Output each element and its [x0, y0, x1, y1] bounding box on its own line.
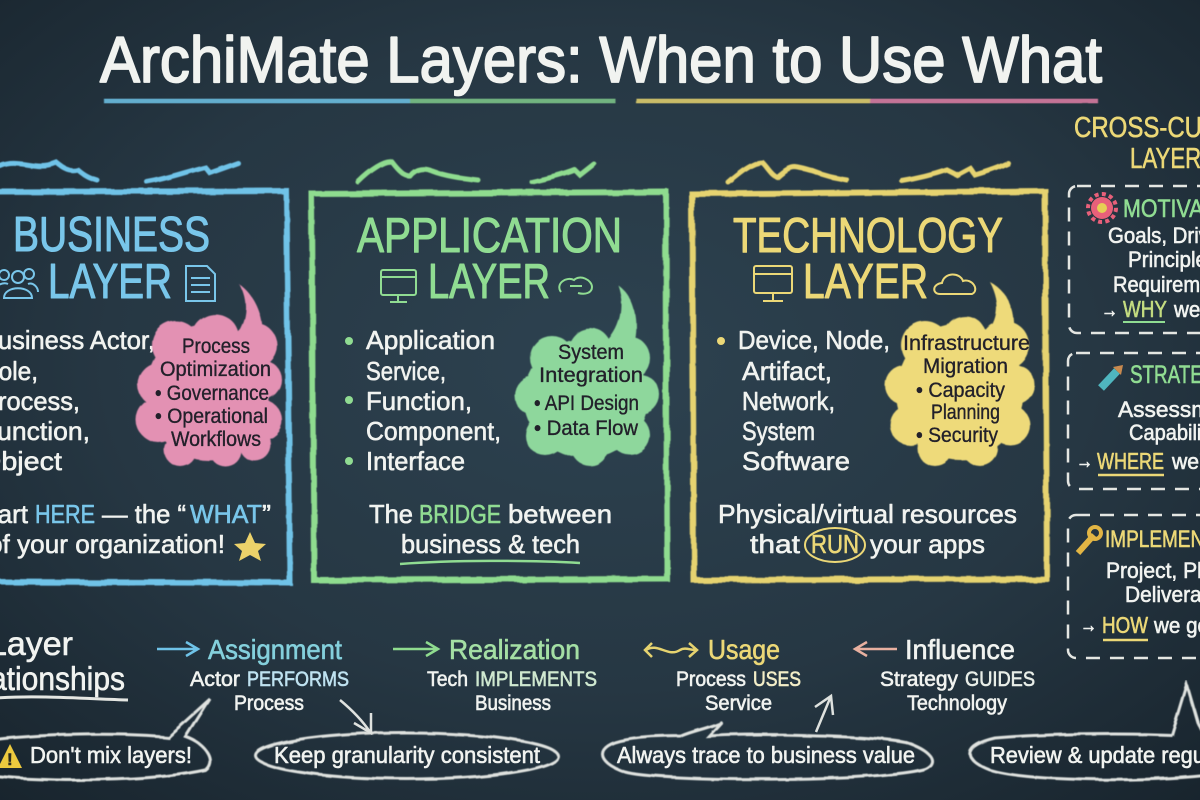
text: application takeaway: business & tech [401, 529, 580, 559]
text: business takeaway: — the “ [102, 499, 186, 529]
panel: strategy: WHERE [1097, 448, 1164, 474]
heading: application layer: LAYER [428, 255, 550, 309]
icon: wrench [1078, 527, 1101, 553]
relationship: assignment: Assignment [208, 634, 342, 665]
icon: people [0, 269, 38, 298]
panel: motivation: → [1101, 299, 1118, 322]
heading: technology layer [733, 209, 1003, 309]
list: technology elements [717, 325, 890, 476]
callout: business use cases: Optimization [160, 358, 271, 381]
relationship: assignment: Process [234, 692, 304, 715]
relationship: assignment [157, 634, 349, 715]
callout: keep granularity consistent [256, 700, 558, 779]
relationship: influence [855, 634, 1035, 715]
list: technology elements: System [742, 416, 815, 446]
text: business takeaway [0, 499, 271, 559]
panel: technology layer [692, 162, 1047, 580]
callout: application use cases: • API Design [534, 392, 639, 415]
heading: business layer [13, 208, 210, 309]
relationship: usage: Service [705, 692, 772, 715]
callout: application use cases [514, 285, 660, 466]
list: technology elements: Network, [742, 386, 835, 416]
text: business takeaway: HERE [35, 499, 95, 529]
arrow: to usage [815, 696, 833, 732]
panel: business layer [0, 163, 290, 583]
heading: layer relationships [0, 625, 128, 700]
callout: business use cases: Workflows [171, 428, 261, 451]
text: technology takeaway [718, 499, 1017, 562]
callout: business use cases: Process [182, 335, 250, 358]
arrow: to granularity callout [340, 700, 371, 733]
list: application elements: Component, [366, 416, 501, 446]
callout: technology use cases: • Capacity [916, 379, 1005, 402]
list: application elements: Service, [366, 356, 446, 386]
callout: always trace to business value [602, 696, 932, 779]
icon: monitor [381, 270, 416, 302]
panel: implementation: → [1080, 614, 1097, 637]
icon: warning [0, 744, 22, 769]
list: application elements [345, 325, 501, 476]
heading: business layer: LAYER [48, 255, 172, 309]
text: application takeaway [369, 499, 612, 564]
callout: don't mix layers: Don't mix layers! [30, 742, 192, 768]
list: technology elements: Software [742, 446, 850, 476]
callout: application use cases: Integration [539, 364, 643, 387]
relationship: assignment: PERFORMS [247, 668, 349, 691]
list: technology elements: Artifact, [742, 356, 832, 386]
relationship: usage [645, 634, 801, 715]
list: application elements: Application [366, 325, 495, 355]
icon: flower [1088, 194, 1116, 222]
relationship: usage: USES [753, 668, 801, 691]
callout: keep granularity consistent: Keep granularity consistent [274, 742, 541, 768]
icon: pencil [1101, 365, 1123, 388]
list: application elements: Function, [366, 386, 472, 416]
relationship: realization: Business [475, 692, 551, 715]
relationship: influence: Influence [905, 634, 1015, 665]
panel: strategy [1068, 353, 1200, 489]
text: business takeaway: ” [262, 499, 271, 529]
icon: linked cloud [559, 278, 592, 294]
panel: motivation [1069, 186, 1200, 333]
list: application elements: Interface [366, 446, 465, 476]
text: technology takeaway: RUN [811, 529, 859, 559]
text: technology takeaway: that [750, 529, 801, 559]
relationship: influence: Technology [907, 692, 1007, 715]
relationship: realization [393, 634, 597, 715]
callout: technology use cases: Planning [931, 401, 1000, 424]
callout: don't mix layers [0, 699, 210, 780]
callout: business use cases: • Operational [155, 405, 268, 428]
text: application takeaway: BRIDGE [419, 499, 501, 529]
panel: motivation: WHY [1123, 296, 1167, 322]
arrow: assignment [157, 642, 198, 656]
callout: technology use cases: Migration [923, 355, 1008, 378]
callout: technology use cases: Infrastructure [903, 332, 1030, 355]
list: business elements [0, 325, 155, 476]
relationship: assignment: Actor [190, 668, 240, 691]
panel: implementation: HOW [1102, 612, 1148, 638]
text: business takeaway: WHAT [190, 499, 262, 529]
arrow: usage [645, 643, 697, 657]
panel: application layer [312, 162, 667, 580]
heading: cross-cutting layers [1074, 112, 1200, 175]
callout: technology use cases [885, 282, 1035, 466]
icon: warning: ! [7, 750, 13, 769]
relationship: influence: Strategy [880, 668, 958, 691]
text: technology takeaway: your apps [870, 529, 985, 559]
icon: cloud [934, 274, 975, 294]
panel: implementation [1068, 515, 1200, 658]
heading: business layer: BUSINESS [13, 208, 210, 262]
heading: technology layer: TECHNOLOGY [733, 209, 1003, 263]
icon: document [186, 266, 215, 301]
relationship: realization: IMPLEMENTS [475, 668, 597, 691]
relationship: influence: GUIDES [965, 668, 1035, 691]
title: ArchiMate Layers: When to Use What [100, 23, 1102, 96]
relationship: realization: Realization [449, 634, 580, 665]
icon: monitor [754, 266, 792, 301]
callout: business use cases [136, 285, 282, 466]
relationship: realization: Tech [427, 668, 468, 691]
heading: application layer: APPLICATION [357, 209, 622, 263]
callout: review and update regularly [970, 685, 1200, 780]
callout: application use cases: System [558, 341, 624, 364]
callout: technology use cases: • Security [916, 424, 998, 447]
heading: application layer [357, 209, 622, 309]
icon: star [234, 532, 266, 561]
text: technology takeaway: Physical/virtual resources [718, 499, 1017, 529]
heading: technology layer: LAYER [803, 255, 928, 309]
callout: always trace to business value: Always trace to business value [617, 742, 915, 768]
callout: business use cases: • Governance [155, 382, 269, 405]
relationship: usage: Usage [708, 634, 780, 665]
panel: strategy: → [1076, 450, 1093, 473]
callout: application use cases: • Data Flow [534, 417, 639, 440]
list: technology elements: Device, Node, [738, 325, 890, 355]
arrow: realization [393, 642, 438, 656]
relationship: usage: Process [676, 668, 746, 691]
text: application takeaway: between [508, 499, 612, 529]
arrow: influence [855, 642, 897, 656]
text: application takeaway: The [369, 499, 413, 529]
